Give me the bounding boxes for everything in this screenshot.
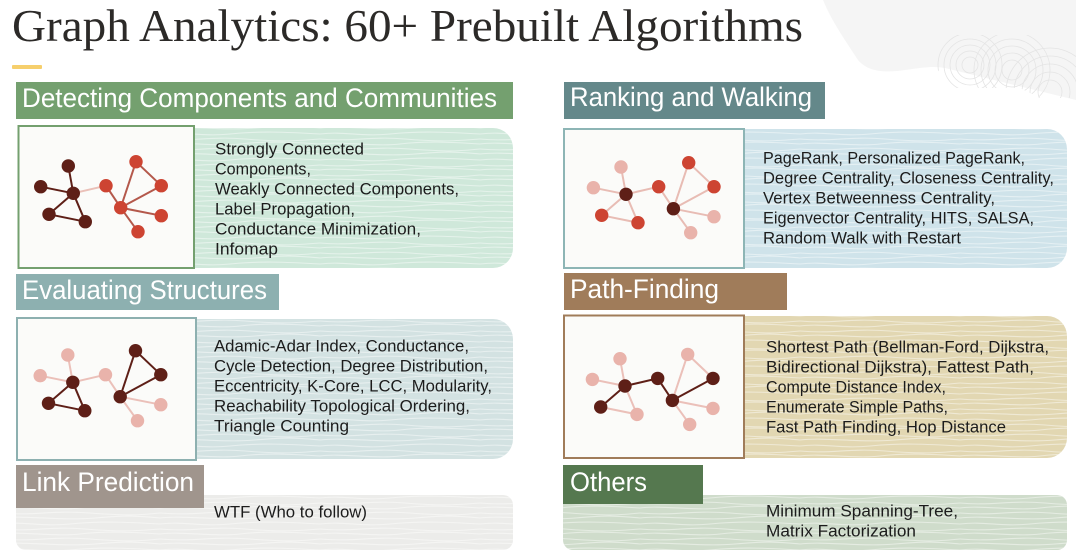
- text block: others algorithms: [766, 502, 958, 540]
- text block: link prediction algorithms: WTF (Who to follow): [214, 502, 367, 522]
- panel: Others: [563, 465, 1067, 550]
- text block: evaluating structures algorithms: Adamic-Adar Index, Conductance,: [214, 336, 469, 356]
- heading: others: Others: [570, 467, 647, 497]
- text block: detecting components algorithms: Infomap: [215, 240, 278, 258]
- text block: evaluating structures algorithms: Eccentricity, K-Core, LCC, Modularity,: [214, 376, 492, 396]
- text block: evaluating structures algorithms: Triangle Counting: [214, 416, 349, 436]
- icon: ranked nodes graph: [587, 156, 721, 239]
- panel: Path-Finding: [564, 273, 1067, 458]
- text block: path-finding algorithms: [766, 338, 1049, 436]
- text background: link prediction: [16, 495, 513, 550]
- decorative background texture, top right: [824, 0, 1076, 100]
- icon: triangle structure graph: [34, 344, 168, 427]
- heading: path-finding: [564, 273, 787, 310]
- text block: path-finding algorithms: Bidirectional Dijkstra), Fattest Path,: [766, 358, 1034, 376]
- title: Graph Analytics: 60+ Prebuilt Algorithms: [12, 1, 803, 51]
- text block: ranking and walking algorithms: Random Walk with Restart: [763, 228, 961, 248]
- text block: detecting components algorithms: Conductance Minimization,: [215, 220, 421, 238]
- title accent rule: [12, 65, 42, 69]
- text block: path-finding algorithms: Enumerate Simple Paths,: [766, 398, 948, 416]
- heading: link prediction: Link Prediction: [22, 467, 194, 497]
- graph box: detecting components: [18, 126, 194, 268]
- icon: community graph: [34, 155, 168, 238]
- text block: ranking and walking algorithms: [763, 148, 1054, 248]
- text block: detecting components algorithms: Label Propagation,: [215, 200, 355, 218]
- heading: ranking and walking: Ranking and Walking: [570, 82, 812, 112]
- text background: ranking and walking: [740, 129, 1067, 268]
- text block: evaluating structures algorithms: [214, 336, 492, 436]
- text background: path-finding: [740, 316, 1067, 458]
- text block: detecting components algorithms: Weakly Connected Components,: [215, 180, 459, 198]
- text block: evaluating structures algorithms: Reachability Topological Ordering,: [214, 396, 470, 416]
- panel: Ranking and Walking: [564, 82, 1067, 268]
- text block: others algorithms: Minimum Spanning-Tree,: [766, 502, 958, 520]
- text block: detecting components algorithms: Strongly Connected: [215, 140, 364, 158]
- heading: others: [563, 465, 703, 504]
- text background: evaluating structures: [190, 319, 513, 459]
- text block: path-finding algorithms: Compute Distance Index,: [766, 378, 946, 396]
- heading: link prediction: [16, 465, 204, 508]
- text block: ranking and walking algorithms: Vertex Betweenness Centrality,: [763, 188, 995, 208]
- text block: path-finding algorithms: Shortest Path (Bellman-Ford, Dijkstra,: [766, 338, 1049, 356]
- icon: highlighted path graph: [586, 348, 720, 431]
- text block: ranking and walking algorithms: Eigenvector Centrality, HITS, SALSA,: [763, 208, 1034, 228]
- text block: path-finding algorithms: Fast Path Finding, Hop Distance: [766, 418, 1006, 436]
- text background: others: [563, 495, 1067, 550]
- text background: detecting components: [190, 128, 513, 268]
- text block: ranking and walking algorithms: Degree Centrality, Closeness Centrality,: [763, 168, 1054, 188]
- graph box: ranking and walking: [564, 129, 744, 268]
- panel: Detecting Components and Communities: [16, 82, 513, 268]
- text block: detecting components algorithms: [215, 140, 459, 258]
- panel: Evaluating Structures: [16, 274, 513, 460]
- heading: path-finding: Path-Finding: [570, 274, 719, 304]
- heading: detecting components: Detecting Components and Communities: [22, 83, 497, 113]
- text block: detecting components algorithms: Components,: [215, 160, 311, 178]
- text block: ranking and walking algorithms: PageRank, Personalized PageRank,: [763, 148, 1025, 168]
- panel: Link Prediction: [16, 465, 513, 550]
- text block: evaluating structures algorithms: Cycle Detection, Degree Distribution,: [214, 356, 488, 376]
- graph box: path-finding: [564, 316, 744, 458]
- text block: others algorithms: Matrix Factorization: [766, 522, 916, 540]
- graph box: evaluating structures: [17, 318, 196, 460]
- heading: evaluating structures: Evaluating Structures: [22, 275, 267, 305]
